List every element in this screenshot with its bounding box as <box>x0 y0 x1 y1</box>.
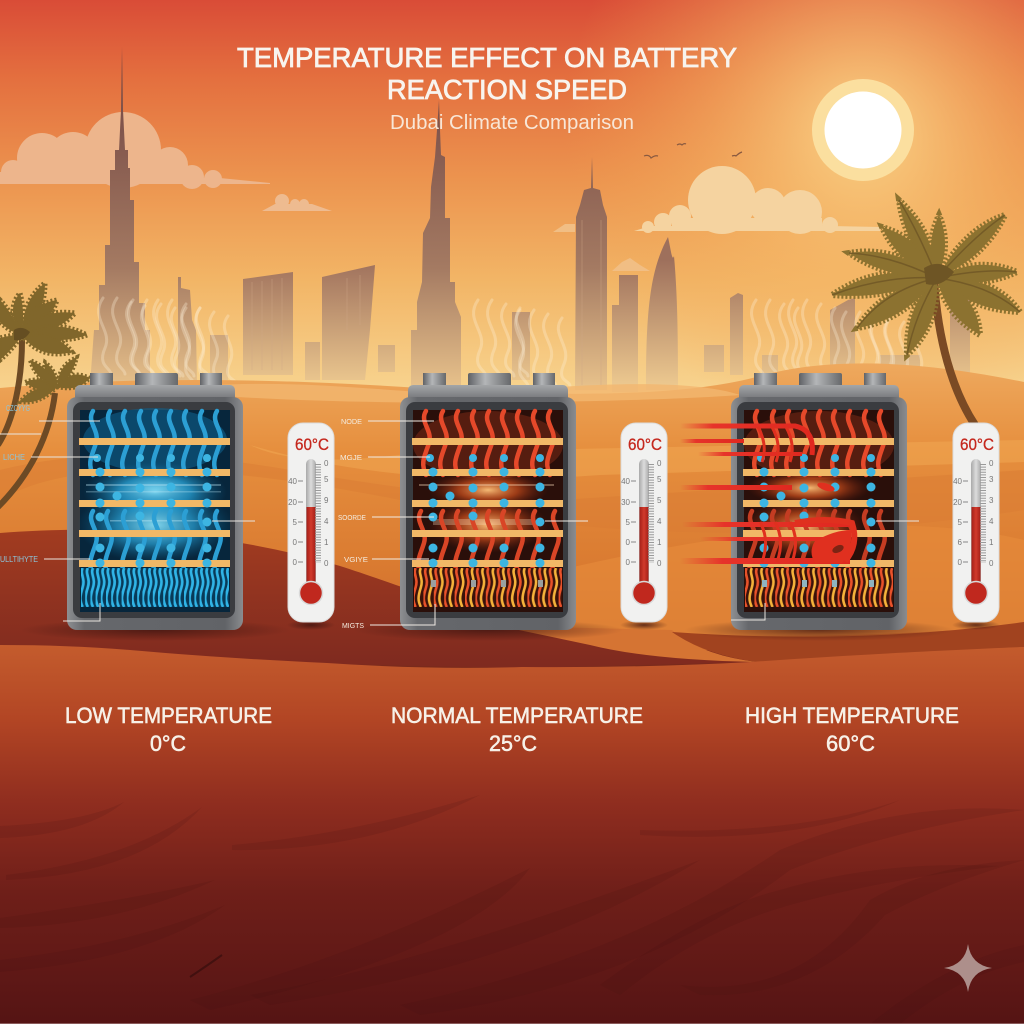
red waves lower <box>749 511 885 575</box>
thermometer: high: 1 <box>989 538 994 547</box>
thermometer: normal: 0 <box>626 558 631 567</box>
sun glow <box>500 0 1024 420</box>
electrolyte flames <box>414 568 562 607</box>
label: high temperature: HIGH TEMPERATURE <box>745 703 959 728</box>
callout labels <box>338 417 368 630</box>
thermometer: normal: 4 <box>657 517 662 526</box>
label: normal temperature <box>391 703 643 756</box>
thermometer: normal: 60°C <box>628 436 662 454</box>
thermometer: high: 20 <box>953 498 963 507</box>
thermometer: normal: 30 <box>621 498 631 507</box>
thermometer: high: 0 <box>989 559 994 568</box>
thermometer: high: 3 <box>989 496 994 505</box>
red waves lower <box>418 511 559 575</box>
palm: left front <box>0 357 90 507</box>
callout labels: LICHE <box>3 453 25 462</box>
birds <box>644 144 742 158</box>
thermometer: low <box>287 423 335 630</box>
tower: burj left <box>90 47 150 385</box>
thermometer: low: 1 <box>324 538 329 547</box>
thermometer: low: 0 <box>324 459 329 468</box>
red waves upper <box>754 411 885 475</box>
right dark dune <box>672 622 1024 662</box>
thermometer: high: 60°C <box>960 436 994 454</box>
battery: high temperature <box>684 373 954 641</box>
electrolyte flames <box>745 568 893 607</box>
thermometer: normal: 1 <box>657 538 662 547</box>
thermometer: high: 0 <box>958 558 963 567</box>
desert dunes <box>0 363 1024 668</box>
foreground floor <box>0 645 1024 1024</box>
callout lines <box>368 421 588 625</box>
label: high temperature: 60°C <box>826 731 875 756</box>
blue waves upper <box>90 411 221 475</box>
callout labels: SOORDE <box>338 513 366 522</box>
dark mark <box>190 955 222 977</box>
dark red dune <box>0 530 760 668</box>
thermometer: normal <box>620 423 668 630</box>
thermometer: normal: 5 <box>657 496 662 505</box>
thermometer: high <box>952 423 1000 630</box>
tower: burj centre <box>411 100 461 385</box>
thermometer: low: 5 <box>293 518 298 527</box>
thermometer: low: 0 <box>293 538 298 547</box>
label: low temperature <box>65 703 272 756</box>
callout labels: VGIYE <box>344 555 368 564</box>
callout lines <box>0 421 255 621</box>
ion markers <box>431 580 543 587</box>
thermometer: high: 3 <box>989 475 994 484</box>
title <box>237 42 737 105</box>
battery: low temperature <box>0 373 290 641</box>
skyline <box>90 47 970 392</box>
label: normal temperature: 25°C <box>489 731 537 756</box>
thermometer: low: 20 <box>288 498 298 507</box>
towers: middle and right skyline <box>178 157 970 392</box>
thermometer: low: 0 <box>293 558 298 567</box>
thermometer: high: 0 <box>989 459 994 468</box>
thermometer: normal: 40 <box>621 477 631 486</box>
background sky <box>0 0 1024 400</box>
electrolyte waves <box>81 568 229 607</box>
sun <box>812 79 914 181</box>
thermometer: low: 60°C <box>295 436 329 454</box>
title: TEMPERATURE EFFECT ON BATTERY <box>237 42 737 73</box>
thermometer: high: 40 <box>953 477 963 486</box>
thermometer: normal: 0 <box>657 459 662 468</box>
building windows <box>252 220 601 385</box>
battery window hot <box>742 410 894 612</box>
battery window warm <box>413 410 563 612</box>
heat streaks <box>680 426 854 564</box>
callout labels: MIGTS <box>342 621 364 630</box>
thermometer: low: 40 <box>288 477 298 486</box>
ion markers <box>762 580 874 587</box>
thermometer: low: 5 <box>324 475 329 484</box>
callout labels: CZCYYG <box>6 404 30 413</box>
palm: left back <box>0 283 87 445</box>
thermometer: high: 6 <box>958 538 963 547</box>
orange wedge <box>500 626 757 662</box>
thermometer: normal: 5 <box>657 475 662 484</box>
bottom edge line <box>0 1023 1024 1024</box>
sand ripples <box>0 795 1024 1024</box>
red waves upper <box>423 411 554 475</box>
subtitle: Dubai Climate Comparison <box>390 112 634 134</box>
battery: normal temperature <box>338 373 623 641</box>
heat haze <box>99 298 926 394</box>
clouds <box>0 112 880 271</box>
callout labels: NODE <box>341 417 362 426</box>
icon: sparkle <box>944 944 992 992</box>
label: high temperature <box>745 703 959 756</box>
thermometer: normal: 5 <box>626 518 631 527</box>
thermometer: high: 4 <box>989 517 994 526</box>
title: REACTION SPEED <box>387 74 627 105</box>
palm: right <box>832 200 1020 425</box>
thermometer: high: 5 <box>958 518 963 527</box>
blue waves lower <box>90 511 221 575</box>
callout labels: MGJE <box>340 453 362 462</box>
thermometer: normal: 0 <box>657 559 662 568</box>
callout labels: ULLTIHYTE <box>0 555 38 564</box>
label: low temperature: LOW TEMPERATURE <box>65 703 272 728</box>
thermometer: low: 0 <box>324 559 329 568</box>
thermometer: normal: 0 <box>626 538 631 547</box>
callout labels <box>0 404 38 564</box>
thermometer: low: 9 <box>324 496 329 505</box>
label: low temperature: 0°C <box>150 731 186 756</box>
callout lines <box>731 521 919 620</box>
battery window cold <box>77 408 233 612</box>
thermometer: low: 4 <box>324 517 329 526</box>
label: normal temperature: NORMAL TEMPERATURE <box>391 703 643 728</box>
